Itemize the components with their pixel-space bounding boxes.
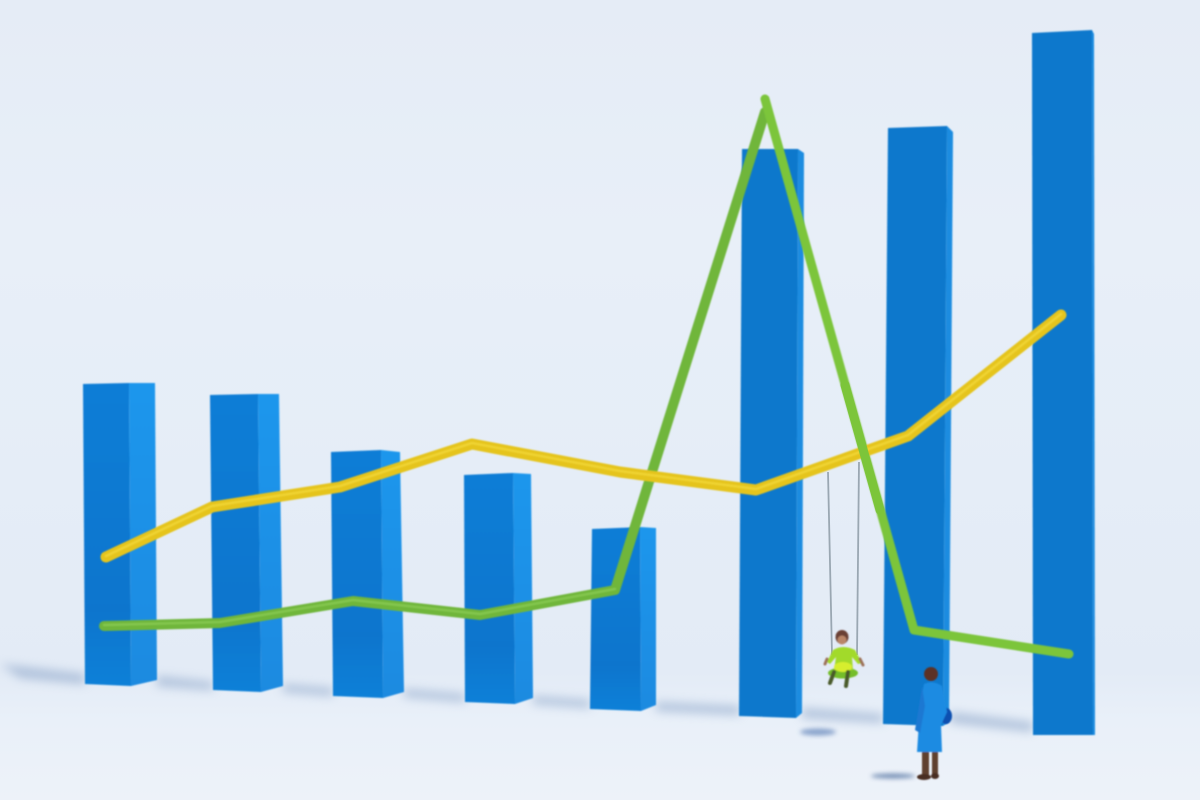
bar 4	[464, 473, 533, 704]
bar 3	[331, 450, 404, 698]
bar 7	[883, 126, 953, 726]
swing shadow	[800, 728, 836, 736]
swing ropes	[828, 462, 859, 655]
yellow line series	[106, 314, 1061, 557]
figure: girl on swing	[825, 630, 863, 686]
figure: woman in blue coat	[915, 667, 952, 780]
floor shadows	[0, 664, 1033, 732]
bar 2	[210, 394, 283, 692]
bar 5	[590, 527, 656, 711]
figure shadow	[871, 774, 915, 778]
bar 8	[1032, 30, 1095, 735]
green line series	[104, 99, 1069, 654]
bar 6	[739, 149, 804, 718]
green line crossing over yellow near bar 7	[845, 385, 880, 510]
bar 1	[83, 383, 157, 686]
